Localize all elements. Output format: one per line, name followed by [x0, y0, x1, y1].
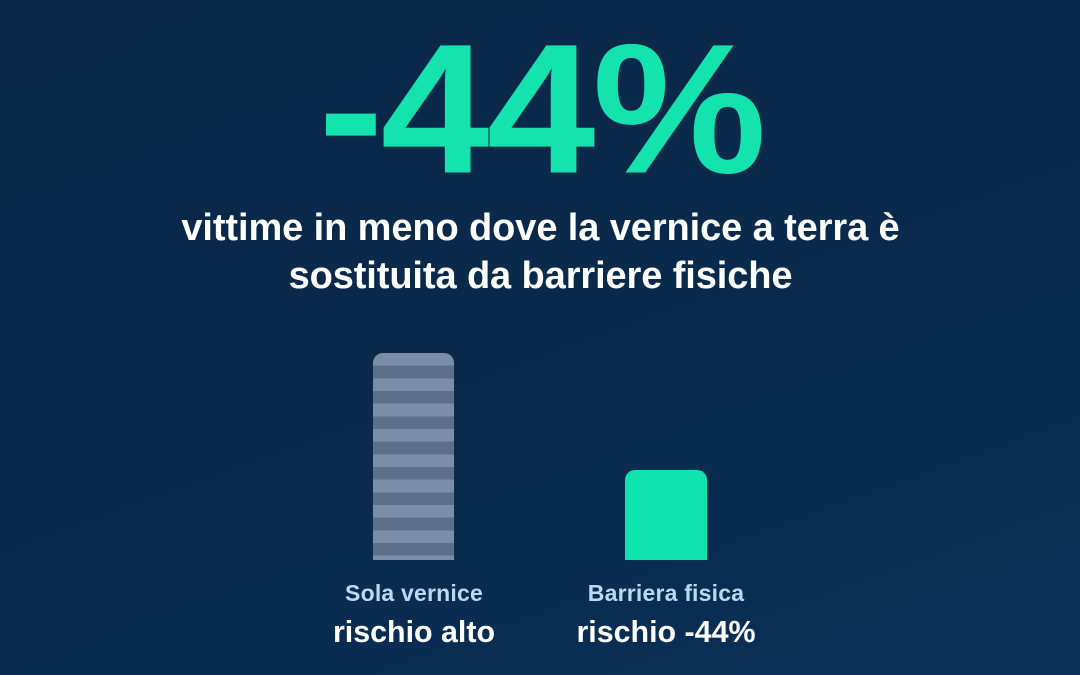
- subtitle: vittime in meno dove la vernice a terra è: [181, 207, 900, 249]
- value: rischio -44%: rischio -44%: [576, 615, 756, 649]
- label: sola vernice: Sola vernice: [345, 580, 483, 606]
- bar: sola vernice: [373, 353, 454, 560]
- value: rischio alto: rischio alto: [333, 615, 495, 649]
- subtitle: [181, 207, 900, 297]
- headline stat: -44%: -44%: [318, 5, 763, 212]
- chart: bar comparison: [333, 353, 756, 649]
- subtitle: sostituita da barriere fisiche: [289, 255, 792, 297]
- bar: barriera fisica: [625, 470, 707, 560]
- label: barriera fisica: Barriera fisica: [588, 580, 744, 606]
